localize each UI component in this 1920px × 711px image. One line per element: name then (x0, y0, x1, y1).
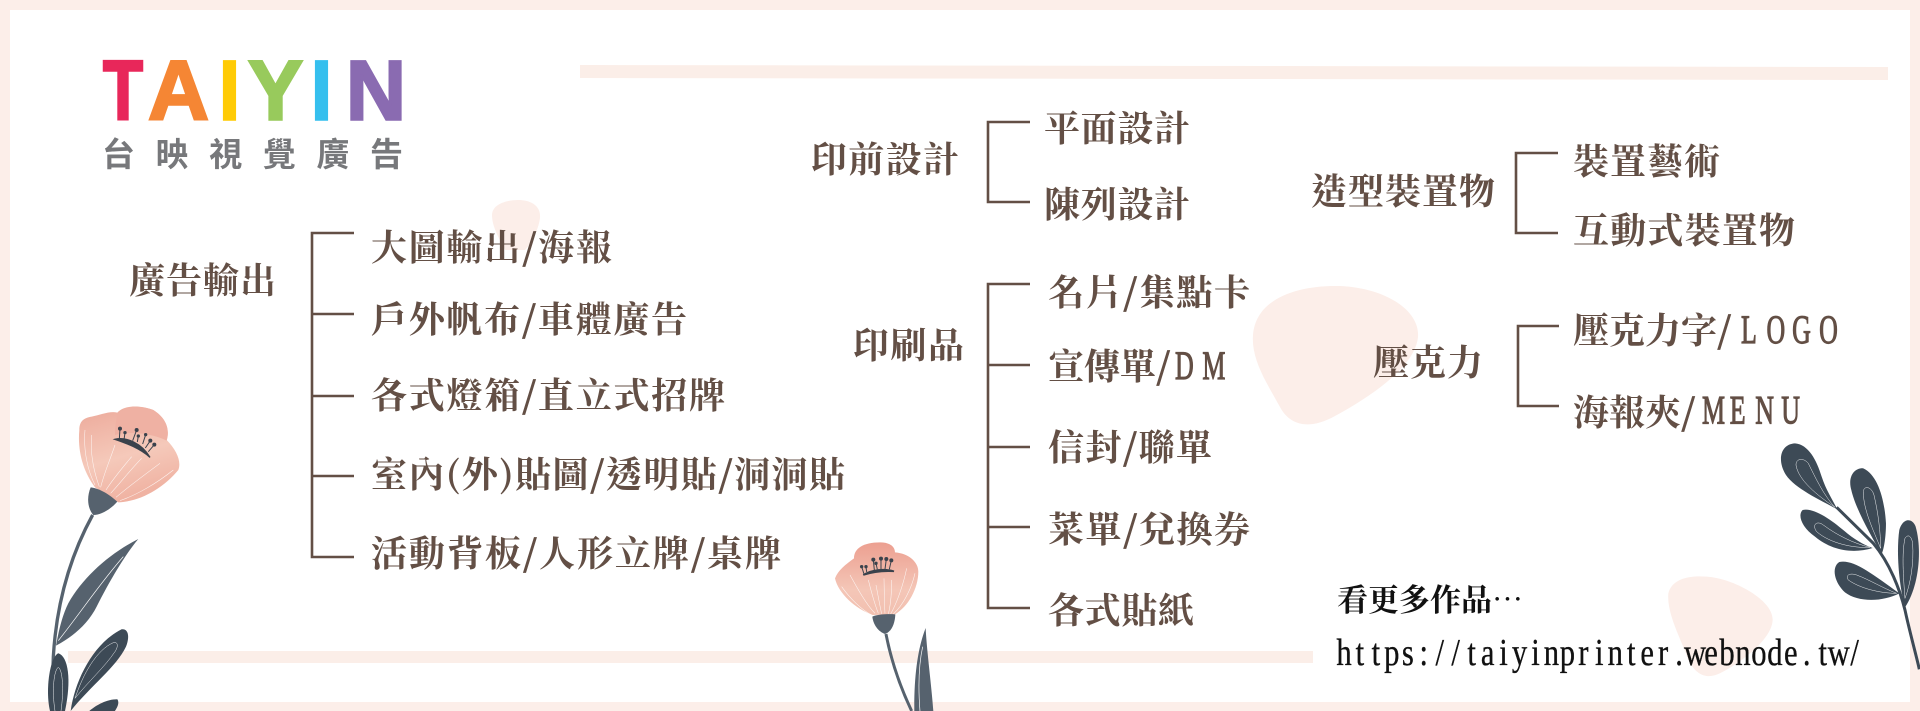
tree: 廣告輸出 (129, 220, 845, 577)
item: 各式燈箱/直立式招牌 (371, 368, 725, 419)
heading: 造型裝置物: 造型裝置物 (1311, 164, 1495, 215)
leaf 3 (1800, 510, 1873, 551)
leaf vertical vein (53, 667, 63, 711)
bracket (988, 122, 1030, 202)
item: 大圖輸出/海報 (371, 220, 612, 271)
bottom decorative stripe (68, 651, 1313, 663)
item: 宣傳單/ (1048, 339, 1170, 390)
item: MENU (1702, 389, 1800, 433)
leaf upper (56, 539, 138, 646)
leaf 4 (1835, 562, 1899, 600)
heading: 印刷品: 印刷品 (853, 318, 964, 369)
item: 互動式裝置物 (1573, 203, 1795, 254)
blob: small behind first list (492, 200, 540, 250)
calyx (88, 487, 117, 515)
item: 海報夾/ (1573, 385, 1695, 436)
leaf 1 (1781, 443, 1837, 509)
flower: centre (835, 542, 933, 711)
top decorative stripe (580, 65, 1888, 80)
stem (1837, 507, 1919, 669)
bracket (988, 284, 1030, 608)
item: 菜單/兌換券 (1048, 502, 1250, 553)
petals (835, 542, 918, 615)
stamens (860, 557, 894, 575)
stamens (115, 427, 156, 457)
item: 戶外帆布/車體廣告 (371, 292, 687, 343)
item: 活動背板/人形立牌/桌牌 (371, 526, 781, 577)
leaf 1 vein (1796, 459, 1835, 507)
leaf bottom (89, 699, 118, 711)
blob: lower right (1668, 576, 1773, 676)
item: 裝置藝術 (1573, 134, 1720, 185)
item (1048, 339, 1225, 390)
logo wordmark: I (311, 44, 332, 138)
item: 室內(外)貼圖/透明貼/洞洞貼 (371, 447, 845, 498)
bracket (1516, 153, 1558, 233)
item: LOGO (1741, 308, 1838, 353)
logo wordmark (103, 44, 406, 138)
stem (52, 515, 93, 711)
leaf 2 (1850, 468, 1886, 554)
tree: 印刷品 (853, 265, 1250, 634)
item: 信封/聯單 (1048, 420, 1212, 471)
leaf lower right (71, 629, 128, 711)
blob: large centre (1253, 286, 1418, 424)
leaf vertical (48, 653, 68, 711)
logo wordmark: Y (248, 44, 303, 138)
logo wordmark: N (346, 44, 406, 138)
petal veins (85, 430, 173, 501)
leaf (914, 628, 933, 711)
item: 平面設計 (1044, 101, 1190, 152)
tree: 印前設計 (811, 101, 1190, 228)
logo wordmark: A (148, 44, 209, 138)
tree: 造型裝置物 (1311, 134, 1795, 254)
item (1573, 303, 1838, 354)
tree: 壓克力 (1373, 303, 1838, 436)
item: 名片/集點卡 (1048, 265, 1250, 316)
call to action (1336, 575, 1859, 674)
logo subtitle: 台映視覺廣告 (102, 136, 424, 173)
logo (102, 44, 424, 173)
flower: left (48, 407, 179, 711)
leaf vein (919, 647, 923, 711)
leaf 5 vein (1903, 536, 1913, 598)
item: 陳列設計 (1044, 177, 1190, 228)
bracket (312, 233, 354, 557)
branch: right (1781, 443, 1919, 669)
petals (79, 407, 179, 502)
upper petal (115, 407, 168, 441)
stem (886, 634, 912, 711)
item: 各式貼紙 (1048, 583, 1194, 634)
heading: 壓克力: 壓克力 (1373, 335, 1483, 386)
item: 壓克力字/ (1573, 303, 1731, 354)
petal veins (842, 568, 915, 615)
bracket (1518, 326, 1559, 406)
leaf 3 vein (1815, 523, 1870, 547)
website url: https://taiyinprinter.webnode.tw/ (1336, 632, 1859, 674)
leaf 2 vein (1863, 488, 1881, 548)
item: DM (1175, 344, 1225, 389)
logo wordmark: T (103, 44, 143, 138)
leaf lower right vein (75, 643, 117, 698)
heading: 印前設計: 印前設計 (811, 132, 959, 183)
leaf upper vein (58, 557, 123, 641)
leaf 5 (1898, 520, 1919, 607)
calyx (872, 614, 895, 634)
heading: 廣告輸出: 廣告輸出 (129, 253, 276, 304)
leaf 4 vein (1847, 574, 1897, 593)
item (1573, 385, 1800, 436)
heading: see more: 看更多作品… (1337, 575, 1523, 620)
logo wordmark: I (219, 44, 240, 138)
